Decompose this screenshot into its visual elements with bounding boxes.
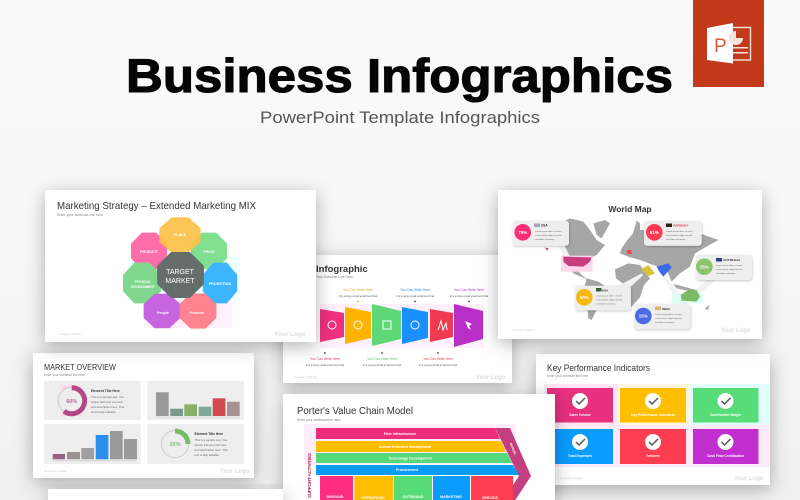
- top labels: You Can Write Here: [343, 288, 373, 292]
- subheading: market overview: Enter your subhead line here: [44, 373, 85, 377]
- callout: India: INDIA: [662, 307, 671, 311]
- value chain chevron: [316, 428, 531, 500]
- KPI tiles: Total Expenses: [568, 454, 592, 458]
- card: donut 60%: Element Title Here: [91, 389, 120, 393]
- card: donut 60%: [44, 381, 141, 420]
- callout: Australia: Lorem ipsum dolor sit amet,: [716, 264, 743, 267]
- logo text: Your Logo: [476, 375, 506, 381]
- octagon diagram: PRICE: [204, 250, 215, 254]
- icon: PowerPoint logo: P: [714, 36, 727, 57]
- panel: market overview: [33, 353, 254, 478]
- value chain chevron: SERVICE: [482, 496, 498, 500]
- octagon diagram: TARGET: [166, 269, 195, 276]
- bar chart: top right: [147, 381, 244, 420]
- footer note: Company Details: [560, 476, 583, 480]
- logo text: Your Logo: [734, 476, 764, 482]
- callout: Australia: consectetuer adipiscing elit,: [716, 268, 743, 271]
- octagon diagram: People: [157, 311, 169, 315]
- octagon diagram: PLACE: [174, 233, 187, 237]
- heading: world map: World Map: [608, 204, 652, 214]
- card: donut 25%: simply add your own text: [194, 443, 227, 447]
- bottom labels: You Can Write Here: [310, 357, 340, 361]
- logo text: Your Logo: [274, 331, 306, 338]
- heading: Porter's value chain: Porter's Value Chain Model: [297, 406, 413, 417]
- icon: PowerPoint logo: [693, 0, 764, 87]
- value chain chevron: MARKETING: [440, 495, 462, 499]
- subheading: process infographic: Your Subhead Line Here: [316, 275, 353, 279]
- subheading: marketing mix: Enter your subhead line here: [57, 213, 103, 217]
- card: donut 25%: text is fully editable.: [194, 453, 220, 457]
- compression tint behind process: [320, 304, 484, 348]
- KPI tiles: Sales Volume: [569, 413, 591, 417]
- card: donut 25%: [147, 424, 244, 464]
- callout: KSA: KSA: [602, 288, 609, 292]
- value chain chevron: Firm Infrastructure: [384, 432, 416, 436]
- callout: India: consectetuer adipiscing elit,: [655, 317, 682, 320]
- callout: KSA: [575, 286, 631, 310]
- highlight: Australia: [681, 290, 700, 302]
- process arrows: [320, 304, 483, 347]
- card: donut 60%: text is fully editable.: [91, 410, 116, 414]
- value chain chevron: MARGIN: [509, 442, 517, 455]
- octagon diagram: MARKET: [165, 278, 195, 285]
- top labels: It is a long email email text that: [450, 294, 488, 298]
- callout: Germany: GERMANY: [673, 224, 688, 228]
- world map: [545, 218, 720, 320]
- callout: India: [634, 304, 690, 329]
- value chain chevron: Human Resource Management: [379, 445, 432, 449]
- footer note: Company Details: [58, 332, 81, 336]
- value chain chevron: INBOUND: [327, 495, 344, 499]
- panel: world map: [498, 190, 762, 339]
- heading: KPI: Key Performance Indicators: [547, 363, 650, 373]
- callout: KSA: 50%: [580, 295, 589, 300]
- card: donut 25%: Element Title Here: [194, 432, 223, 436]
- bottom labels: You Can Write Here: [423, 357, 453, 361]
- heading: market overview: MARKET OVERVIEW: [44, 363, 116, 372]
- panel: process infographic: [283, 255, 512, 383]
- highlight: USA: [563, 257, 592, 267]
- top labels: [339, 288, 488, 302]
- card: donut 60%: and description here. This: [91, 405, 125, 409]
- callout: Australia: [696, 255, 752, 280]
- panel: marketing mix: [45, 190, 316, 342]
- panel: key performance indicators: [536, 354, 770, 485]
- top labels: It is a long email email text that: [339, 294, 377, 298]
- bar chart: bottom left: [44, 424, 141, 464]
- octagon diagram: Process: [190, 311, 204, 315]
- value chain chevron: Procurement: [396, 468, 419, 472]
- card: donut 25%: This is a sample text. You: [194, 438, 228, 442]
- subtitle: PowerPoint Template Infographics: [260, 108, 540, 127]
- value chain chevron: OPERATIONS: [361, 496, 385, 500]
- value chain chevron: OUTBOUND: [403, 495, 424, 499]
- callout: USA: USA: [541, 224, 548, 228]
- octagon diagram: ENVIRONMENT: [131, 285, 155, 289]
- KPI tiles: [547, 388, 758, 464]
- subheading: KPI: Enter your subhead line here: [547, 374, 588, 378]
- highlight: Saudi Arabia: [641, 265, 655, 276]
- KPI tiles: Contribution Margin: [710, 413, 741, 417]
- callout: Germany: Lorem ipsum dolor sit amet,: [666, 230, 693, 233]
- octagon diagram: [123, 217, 237, 329]
- card: donut 60%: 60%: [66, 399, 77, 405]
- callout: Australia: sed diam nonummy.: [716, 273, 736, 275]
- callout: India: Lorem ipsum dolor sit amet,: [655, 313, 682, 316]
- callout: India: sed diam nonummy.: [655, 322, 675, 324]
- callout: USA: consectetuer adipiscing elit,: [535, 234, 562, 237]
- callout: Germany: sed diam nonummy.: [666, 239, 686, 241]
- callout: USA: [513, 221, 569, 246]
- footer note: Company Details: [512, 328, 535, 332]
- callout: Germany: [644, 221, 702, 246]
- top labels: You Can Write Here: [400, 288, 430, 292]
- footer note: Company Details: [44, 469, 67, 473]
- card: donut 25%: 25%: [169, 442, 181, 448]
- top labels: You Can Write Here: [454, 288, 484, 292]
- bottom labels: It is a long email email text that: [419, 363, 457, 367]
- highlight: Alaska: [545, 247, 549, 251]
- callout: USA: 75%: [518, 230, 527, 235]
- bottom labels: [306, 352, 457, 367]
- panel: partial slide at bottom: [48, 489, 283, 500]
- logo text: Your Logo: [220, 469, 250, 475]
- callout: Australia: 25%: [700, 264, 709, 269]
- callout: India: 15%: [639, 314, 648, 319]
- callout: Germany: consectetuer adipiscing elit,: [666, 234, 693, 237]
- card: donut 60%: simply add your own text: [91, 400, 123, 404]
- KPI tiles: Key Performance Indicators: [631, 413, 675, 417]
- octagon diagram: PRODUCT: [140, 250, 159, 254]
- support activities label: SUPPORT ACTIVITIES: [307, 453, 312, 498]
- callout: KSA: sed diam nonummy.: [596, 304, 616, 306]
- value chain chevron: Technology Development: [388, 456, 433, 460]
- top labels: It is a long email email text that: [396, 294, 434, 298]
- bottom labels: It is a long email email text that: [306, 363, 344, 367]
- callout: KSA: Lorem ipsum dolor sit amet,: [596, 294, 623, 298]
- heading: marketing mix: Marketing Strategy – Extended Marketing MIX: [57, 200, 256, 212]
- footer note: Company Details: [294, 375, 317, 379]
- octagon diagram: PHYSICAL: [135, 280, 151, 284]
- callout: Australia: AUSTRALIA: [723, 258, 741, 262]
- card: donut 25%: and description here. This: [194, 448, 228, 452]
- octagon diagram: PROMOTION: [209, 282, 231, 286]
- title: Business Infographics: [126, 49, 673, 102]
- callout: Germany: 81%: [650, 230, 659, 235]
- KPI tiles: Turnover: [646, 454, 661, 458]
- callout: KSA: consectetuer adipiscing elit,: [596, 298, 623, 302]
- highlight: India: [657, 263, 672, 277]
- heading: process infographic: Infographic: [316, 264, 368, 275]
- callout: USA: sed diam nonummy.: [535, 239, 555, 241]
- logo text: Your Logo: [721, 328, 751, 334]
- highlight: Germany: [627, 250, 631, 254]
- panel: Porter's value chain: [283, 394, 555, 500]
- bottom labels: You Can Write Here: [367, 357, 397, 361]
- bottom labels: It is a long email email text that: [363, 363, 401, 367]
- subheading: Porter's value chain: Enter your subhead line here: [297, 418, 341, 422]
- callout: USA: Lorem ipsum dolor sit amet,: [535, 230, 562, 233]
- card: donut 60%: This is a sample text. You: [91, 395, 124, 399]
- KPI tiles: Cash Flow Contribution: [707, 454, 744, 458]
